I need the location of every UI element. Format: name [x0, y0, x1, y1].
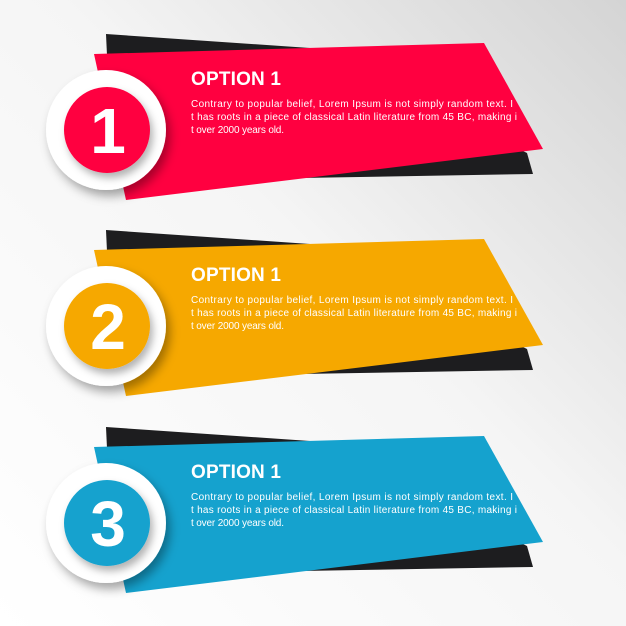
heading: OPTION 1 — [191, 462, 281, 483]
black back shape — [106, 427, 533, 571]
heading: OPTION 1 — [191, 265, 281, 286]
body text: Contrary to popular belief, Lorem Ipsum is not simply random text. I — [191, 492, 513, 503]
body text: t has roots in a piece of classical Latin literature from 45 BC, making i — [191, 505, 517, 516]
black back shape — [106, 34, 533, 178]
panel: option 1 (red) — [46, 34, 543, 200]
red banner — [94, 43, 543, 200]
black back shape — [106, 230, 533, 374]
orange banner — [94, 239, 543, 396]
body text: t has roots in a piece of classical Latin literature from 45 BC, making i — [191, 308, 517, 319]
circle badge 3 — [46, 463, 166, 583]
body text: Contrary to popular belief, Lorem Ipsum is not simply random text. I — [191, 295, 513, 306]
circle badge 1 — [46, 70, 166, 190]
circle badge 2 — [46, 266, 166, 386]
body text: t over 2000 years old. — [191, 125, 284, 136]
circle badge 2: 2 — [90, 291, 126, 363]
body text: t has roots in a piece of classical Latin literature from 45 BC, making i — [191, 112, 517, 123]
heading: OPTION 1 — [191, 69, 281, 90]
body text: t over 2000 years old. — [191, 518, 284, 529]
circle badge 3: 3 — [90, 488, 126, 560]
blue banner — [94, 436, 543, 593]
body text: Contrary to popular belief, Lorem Ipsum is not simply random text. I — [191, 99, 513, 110]
body text: t over 2000 years old. — [191, 321, 284, 332]
panel: option 3 (blue) — [46, 427, 543, 593]
panel: option 2 (orange) — [46, 230, 543, 396]
circle badge 1: 1 — [90, 95, 126, 167]
